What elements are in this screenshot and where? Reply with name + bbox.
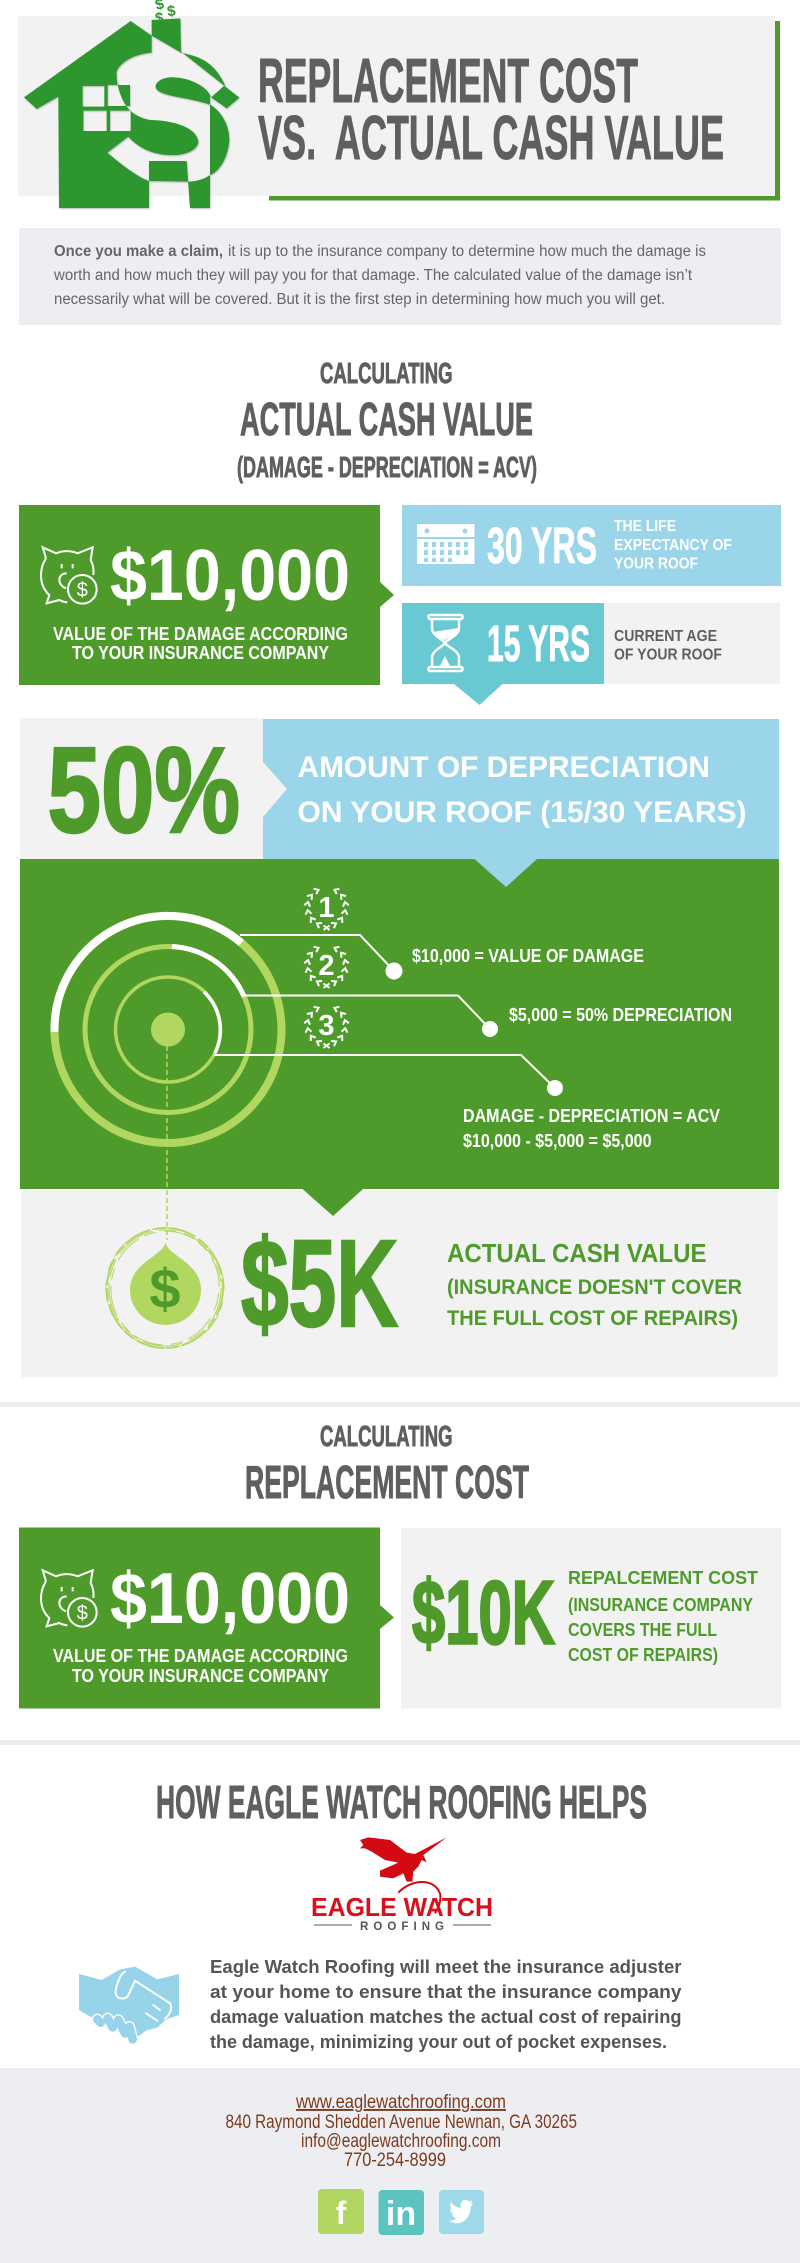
icon: house with dollar sign: $ — [154, 10, 165, 27]
callout line 1 — [240, 935, 402, 980]
contact details — [226, 2092, 577, 2171]
icon: calendar — [417, 524, 474, 564]
panel: value of damage — [19, 505, 394, 685]
text: how we help: damage valuation matches the actual cost of repairing — [210, 2007, 682, 2027]
number: 15 YRS — [487, 615, 590, 672]
labels: $10,000 = VALUE OF DAMAGE — [412, 946, 644, 966]
icon: facebook: f — [336, 2195, 347, 2231]
description: ON YOUR ROOF (15/30 YEARS) — [298, 796, 746, 829]
amount: $10K — [412, 1564, 555, 1664]
labels: $10,000 - $5,000 = $5,000 — [463, 1131, 652, 1151]
description: ACTUAL CASH VALUE — [447, 1238, 706, 1268]
icon: piggy bank: $ — [77, 1603, 88, 1625]
logo: eagle watch roofing — [311, 1837, 493, 1933]
caption: VALUE OF THE DAMAGE ACCORDING — [53, 623, 348, 644]
description: YOUR ROOF — [614, 556, 698, 572]
callout line 3 — [214, 1055, 563, 1096]
labels: $5,000 = 50% DEPRECIATION — [509, 1005, 732, 1025]
icon: linkedin — [378, 2190, 424, 2235]
contact details: 840 Raymond Shedden Avenue Newnan, GA 30265 — [226, 2112, 577, 2133]
caption — [53, 1645, 348, 1686]
description: AMOUNT OF DEPRECIATION — [298, 751, 710, 784]
title — [258, 47, 724, 173]
labels — [412, 946, 732, 1151]
panel: introduction text: Once you make a claim, — [54, 243, 223, 260]
description: COST OF REPAIRS) — [568, 1645, 718, 1665]
panel: introduction text: worth and how much they will pay you for that damage. The calculated value of the damage isn’t — [53, 267, 693, 284]
contact details: 770-254-8999 — [344, 2150, 446, 2171]
description — [614, 628, 722, 664]
caption: TO YOUR INSURANCE COMPANY — [72, 642, 330, 663]
icon: twitter — [439, 2190, 484, 2234]
contact details: info@eaglewatchroofing.com — [301, 2131, 501, 2152]
icon: piggy bank: $ — [77, 580, 88, 602]
icon: hanging dollar: $ — [149, 1257, 181, 1320]
panel: calculation rings — [20, 859, 779, 1225]
panel: footer — [0, 2068, 800, 2263]
text: how we help — [210, 1957, 682, 2052]
badge 3 — [304, 1007, 349, 1048]
icon: house with dollar sign: $ — [166, 2, 177, 20]
panel: 50 percent depreciation — [20, 718, 779, 859]
panel: 5K actual cash value — [21, 1189, 778, 1377]
badge 1 — [304, 889, 349, 930]
labels: DAMAGE - DEPRECIATION = ACV — [463, 1106, 720, 1126]
heading: calculating replacement cost: REPLACEMENT COST — [245, 1456, 529, 1508]
caption — [53, 623, 348, 663]
badge 2: 2 — [318, 950, 335, 982]
icon: facebook — [318, 2189, 364, 2234]
heading: calculating actual cash value: CALCULATING — [320, 358, 452, 390]
icon: piggy bank — [41, 547, 97, 604]
panel: 15 years current age — [402, 603, 780, 705]
description — [614, 518, 732, 572]
panel: 10K replacement cost — [401, 1528, 781, 1708]
chart: concentric rings — [54, 916, 281, 1225]
amount: $10,000 — [110, 536, 350, 616]
panel: value of damage second — [19, 1528, 394, 1708]
description: (INSURANCE DOESN'T COVER — [447, 1276, 742, 1299]
callout line 2 — [244, 996, 498, 1037]
description: THE FULL COST OF REPAIRS) — [447, 1307, 738, 1330]
panel: introduction text — [19, 228, 781, 325]
heading: calculating replacement cost — [245, 1421, 529, 1508]
number: 30 YRS — [487, 517, 597, 574]
badge 1: 1 — [318, 892, 335, 924]
text: how we help: the damage, minimizing your out of pocket expenses. — [210, 2032, 667, 2052]
description — [298, 751, 746, 829]
description — [447, 1238, 742, 1330]
icon: hanging dollar — [89, 1211, 241, 1365]
panel: introduction text: necessarily what will be covered. But it is the first step in determining how much you will get. — [54, 291, 665, 308]
description: THE LIFE — [614, 518, 676, 535]
panel: introduction text: it is up to the insurance company to determine how much the damage is — [228, 243, 706, 260]
text: how we help: Eagle Watch Roofing will meet the insurance adjuster — [210, 1957, 682, 1977]
icon: linkedin: in — [386, 2195, 416, 2233]
logo: eagle watch roofing: ROOFING — [360, 1921, 444, 1933]
heading: calculating replacement cost: CALCULATING — [320, 1421, 452, 1453]
icon: piggy bank — [41, 1570, 97, 1627]
description — [568, 1568, 758, 1665]
description: REPALCEMENT COST — [568, 1568, 758, 1588]
panel: header — [18, 0, 780, 208]
heading: calculating actual cash value: (DAMAGE - DEPRECIATION = ACV) — [237, 452, 537, 484]
icon: handshake — [79, 1967, 179, 2040]
description: (INSURANCE COMPANY — [568, 1595, 753, 1615]
logo: eagle watch roofing: EAGLE WATCH — [311, 1892, 493, 1922]
heading: calculating actual cash value — [237, 358, 537, 484]
badge 3: 3 — [318, 1010, 335, 1042]
description: EXPECTANCY OF — [614, 537, 732, 554]
description: OF YOUR ROOF — [614, 646, 722, 664]
contact details: www.eaglewatchroofing.com — [295, 2092, 506, 2113]
badge 2 — [304, 947, 349, 988]
description: COVERS THE FULL — [568, 1620, 717, 1640]
icon: house with dollar sign — [24, 0, 239, 208]
heading: calculating actual cash value: ACTUAL CASH VALUE — [240, 393, 533, 445]
percentage: 50% — [48, 722, 240, 858]
caption: TO YOUR INSURANCE COMPANY — [72, 1665, 330, 1686]
description: CURRENT AGE — [614, 628, 717, 645]
panel: 30 years life expectancy — [402, 505, 781, 586]
amount: $5K — [241, 1216, 398, 1353]
icon: hourglass — [428, 615, 462, 671]
amount: $10,000 — [110, 1559, 350, 1639]
caption: VALUE OF THE DAMAGE ACCORDING — [53, 1645, 348, 1666]
text: how we help: at your home to ensure that the insurance company — [210, 1982, 682, 2002]
